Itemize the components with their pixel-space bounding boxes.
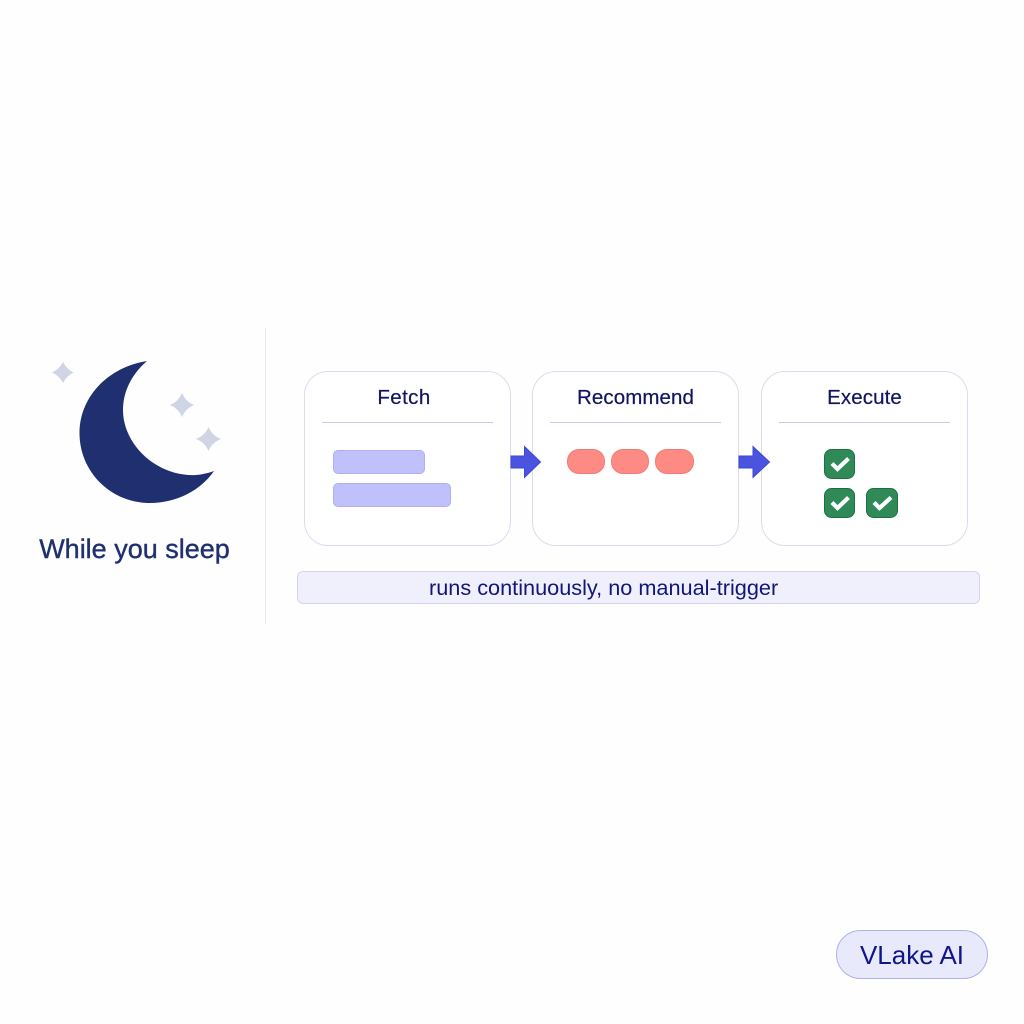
icon: check 3	[866, 488, 898, 518]
bar: long	[333, 483, 451, 507]
heading: fetch: Fetch	[377, 386, 431, 409]
bar: short	[333, 450, 425, 474]
recommendation pill 3	[655, 449, 694, 474]
icon: crescent moon	[80, 361, 214, 503]
icon: check 1	[824, 449, 855, 479]
vertical divider	[265, 328, 266, 624]
arrow: fetch to recommend	[510, 446, 542, 478]
icon: star middle	[170, 393, 194, 417]
recommendation pill 1	[567, 449, 605, 474]
icon: star right	[196, 427, 221, 451]
banner: runs continuously	[297, 571, 980, 604]
banner text: runs continuously, no manual-trigger	[429, 575, 778, 600]
icon: crescent moon with stars	[52, 361, 221, 503]
icon: check 2	[824, 488, 855, 518]
arrow: recommend to execute	[738, 446, 770, 478]
panel: recommend	[532, 371, 739, 546]
badge: VLake AI: VLake AI	[860, 940, 964, 970]
heading: while you sleep: While you sleep	[39, 534, 230, 564]
heading: recommend: Recommend	[577, 386, 694, 409]
badge: VLake AI	[836, 930, 988, 979]
heading: execute: Execute	[827, 386, 902, 409]
panel: while you sleep	[39, 361, 230, 564]
icon: star left	[52, 362, 74, 383]
recommendation pill 2	[611, 449, 649, 474]
panel: execute	[761, 371, 968, 546]
panel: fetch	[304, 371, 511, 546]
